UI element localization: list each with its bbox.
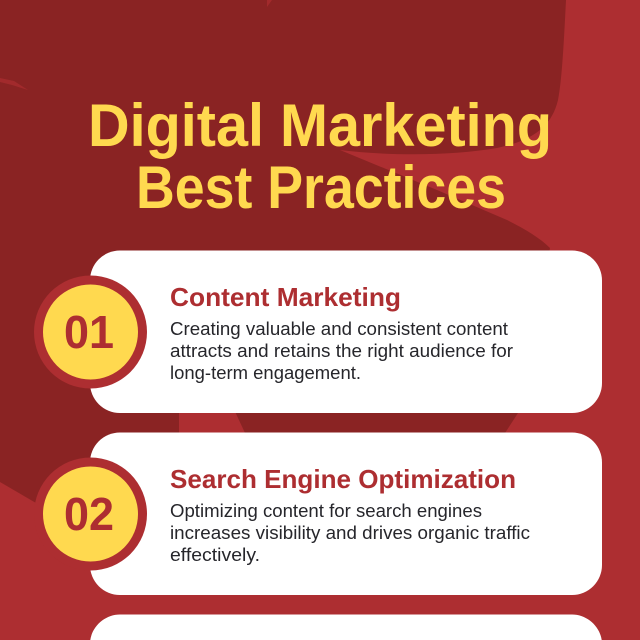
number badge 02: 02 [64,488,114,540]
card 1 body text [170,318,513,383]
card 2 body text [170,500,530,565]
card 1 heading: Content Marketing [170,282,401,312]
card 1 body text: attracts and retains the right audience for [170,340,513,361]
card 2 body text: Optimizing content for search engines [170,500,482,521]
card 1 body text: long-term engagement. [170,362,361,383]
title [88,92,552,221]
card 2: Search Engine Optimization [90,432,602,595]
card 1 body text: Creating valuable and consistent content [170,318,508,339]
title: Best Practices [136,154,506,221]
card 2 heading: Search Engine Optimization [170,464,516,494]
number badge 02 [34,458,147,570]
title: Digital Marketing [88,92,552,159]
card 2 body text: increases visibility and drives organic traffic [170,522,530,543]
card 2 body text: effectively. [170,544,260,565]
number badge 01 [34,276,147,388]
card 3 (cropped) [90,614,602,640]
number badge 01: 01 [64,306,114,358]
card 1: Content Marketing [90,250,602,413]
